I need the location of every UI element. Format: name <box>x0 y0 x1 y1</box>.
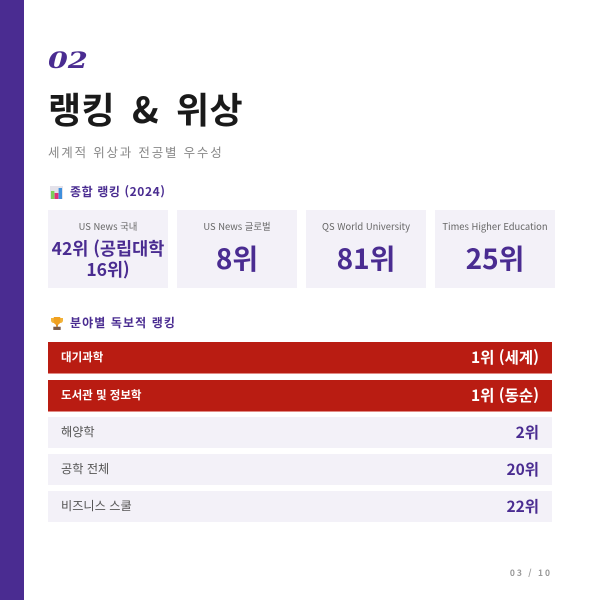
row: engineering overall <box>48 454 552 485</box>
row value: 22위 <box>506 495 539 517</box>
row label: 도서관 및 정보학 <box>61 387 142 403</box>
icon: trophy <box>51 317 63 330</box>
row label: 공학 전체 <box>61 459 109 477</box>
card value <box>52 236 164 282</box>
row label: 해양학 <box>61 422 95 440</box>
row: oceanography <box>48 417 552 448</box>
heading: overall ranking: 종합 랭킹 (2024) <box>70 183 165 200</box>
row label: 비즈니스 스쿨 <box>61 496 132 514</box>
subtitle: 세계적 위상과 전공별 우수성 <box>48 142 224 161</box>
row label: 대기과학 <box>61 349 103 365</box>
row value: 20위 <box>506 458 539 480</box>
card label: US News 국내 <box>79 219 137 233</box>
card value: 16위) <box>86 257 130 282</box>
card value: 8위 <box>216 238 258 278</box>
ranking card: QS <box>306 210 426 288</box>
section number: 02 <box>48 48 88 74</box>
title: 랭킹 & 위상 <box>48 82 243 134</box>
row value: 1위 (동순) <box>471 384 539 406</box>
row value: 1위 (세계) <box>471 346 539 368</box>
ranking card: US News domestic <box>48 210 168 288</box>
card value: 42위 (공립대학 <box>52 236 164 261</box>
row value: 2위 <box>516 421 539 443</box>
sidebar <box>0 0 24 600</box>
card label: US News 글로벌 <box>203 219 271 233</box>
row: atmospheric science <box>48 342 552 373</box>
ranking card: Times <box>435 210 555 288</box>
card label: Times Higher Education <box>442 219 548 233</box>
row: business school <box>48 491 552 522</box>
card label: QS World University <box>322 219 410 233</box>
row: library and information science <box>48 380 552 411</box>
ranking card: US News global <box>177 210 297 288</box>
heading: field rankings: 분야별 독보적 랭킹 <box>70 314 176 331</box>
card value: 25위 <box>466 238 524 278</box>
card value: 81위 <box>337 238 395 278</box>
page number: 03 / 10 <box>510 567 552 579</box>
icon: bar chart <box>50 186 63 199</box>
